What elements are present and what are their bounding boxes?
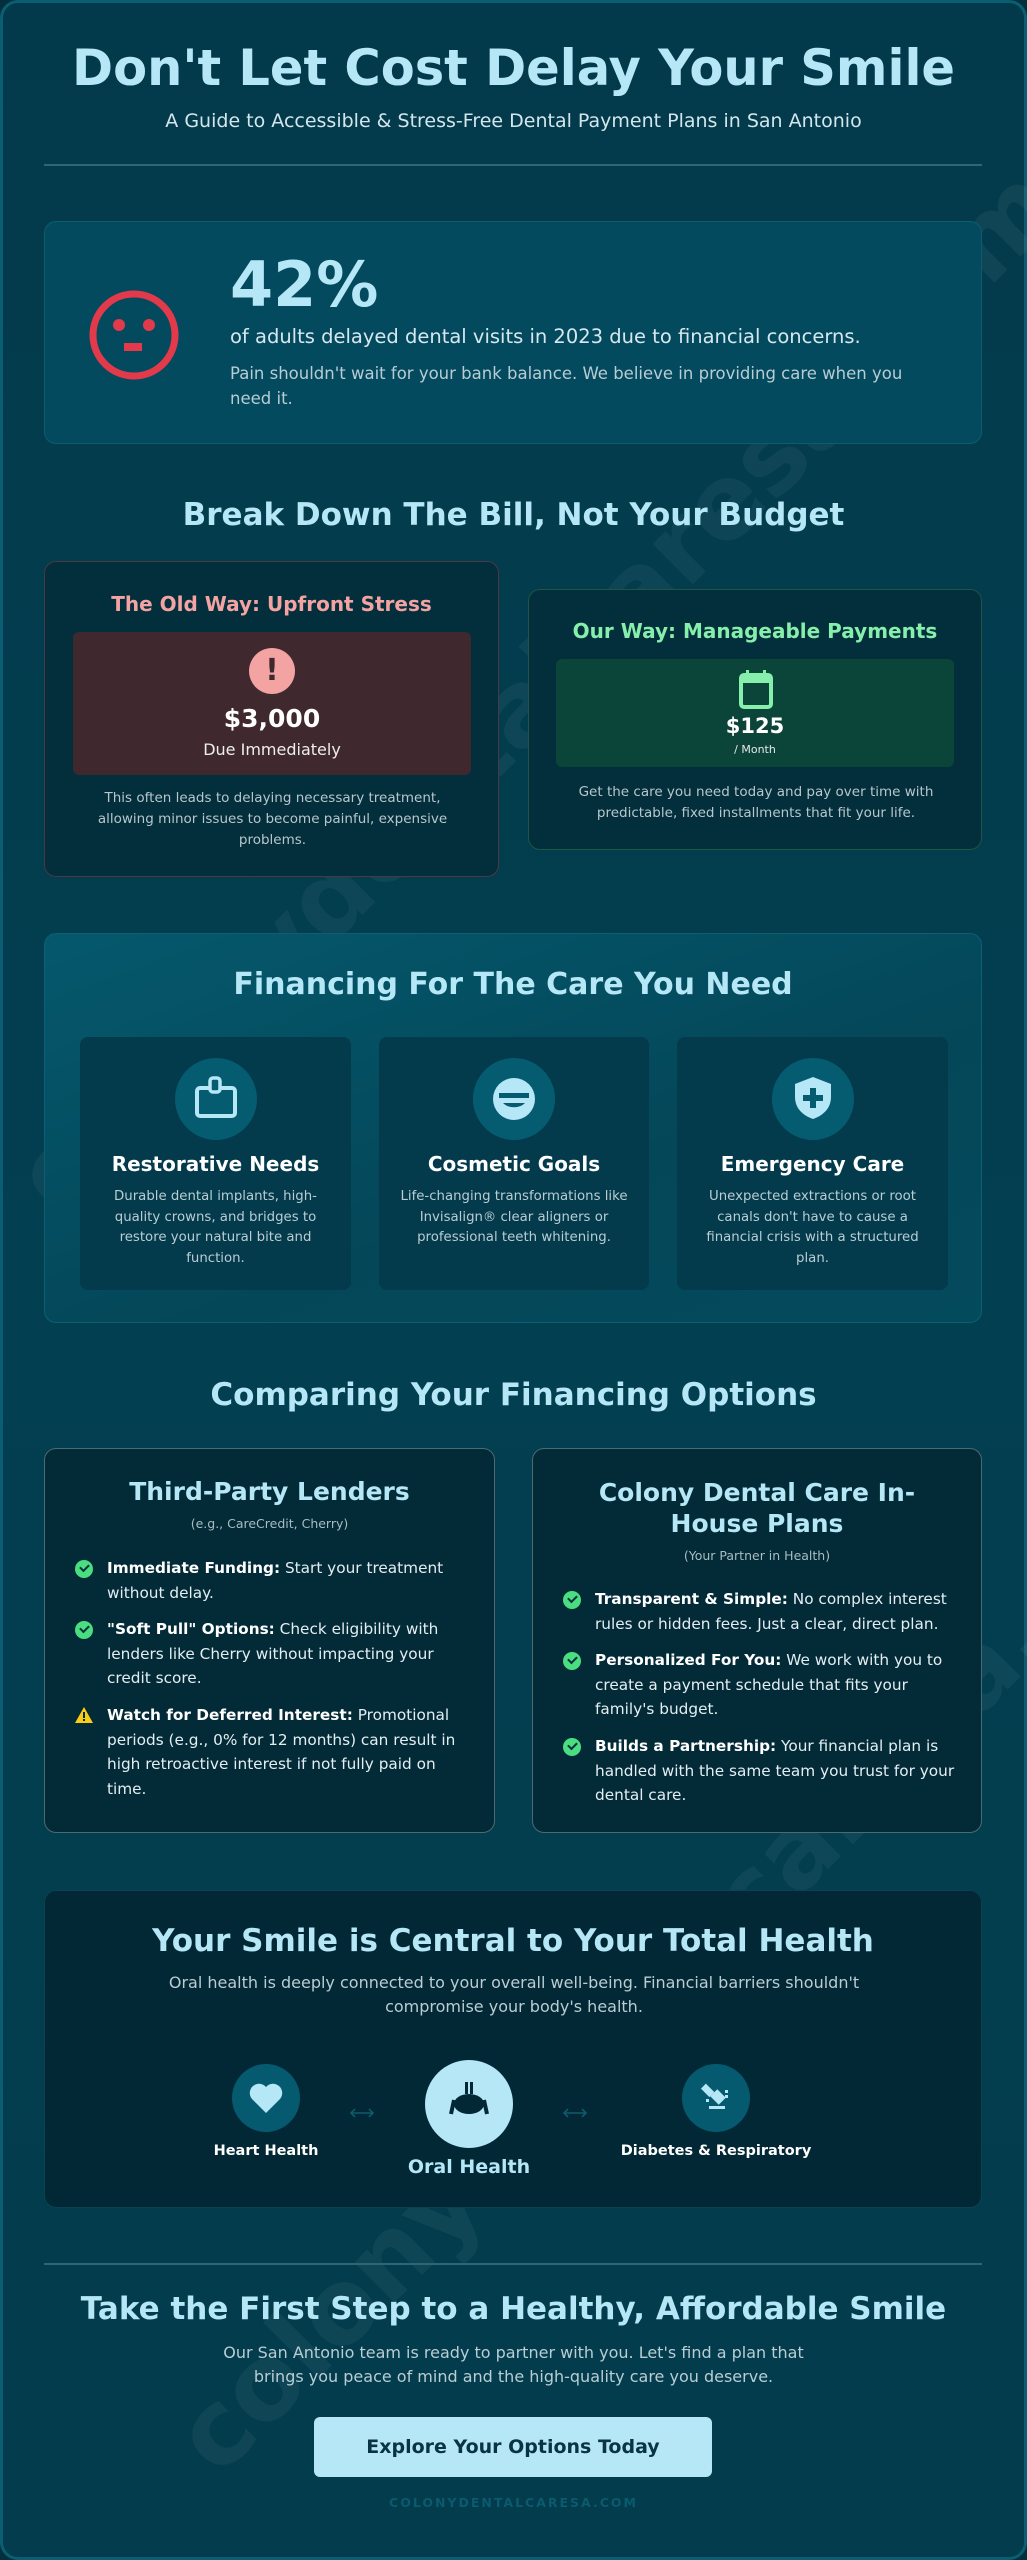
panel: stat (44, 221, 982, 444)
card: emergency (677, 1037, 948, 1290)
price box: $125: / Month (734, 743, 776, 756)
icon: cosmetic (473, 1058, 555, 1140)
panel: third-party lenders: (e.g., CareCredit, Cherry) (191, 1516, 348, 1531)
panel: total health: Oral health is deeply connected to your overall well-being. Financial barriers shouldn't compromise your body's health. (169, 1973, 859, 2016)
item: partnership: Builds a Partnership: Your financial plan is handled with the same team you trust for your dental care. (595, 1737, 954, 1804)
icon: calendar (739, 670, 773, 709)
item: transparent: Transparent & Simple: No complex interest rules or hidden fees. Just a clear, direct plan. (595, 1590, 947, 1632)
icon: diabetes & respiratory: Diabetes & Respiratory (621, 2143, 811, 2159)
panel: financing: Financing For The Care You Need (233, 967, 793, 1002)
title: Don't Let Cost Delay Your Smile (72, 39, 955, 97)
panel: total health: Your Smile is Central to Your Total Health (152, 1923, 874, 1959)
old way text: This often leads to delaying necessary treatment, allowing minor issues to become painful, expensive problems. (98, 790, 447, 848)
price box: $3,000: $3,000 (224, 704, 320, 733)
panel: old way: The Old Way: Upfront Stress (111, 592, 432, 616)
icon: oral health (408, 2060, 530, 2178)
icon: sad face (90, 290, 178, 380)
card: restorative: Restorative Needs (112, 1152, 319, 1176)
item: soft pull: "Soft Pull" Options: Check eligibility with lenders like Cherry without impacting your credit score. (107, 1620, 438, 1687)
card: cosmetic: Cosmetic Goals (428, 1152, 600, 1176)
cta text: Our San Antonio team is ready to partner with you. Let's find a plan that brings you peace of mind and the high-quality care you deserve. (223, 2343, 804, 2386)
arrow (350, 2108, 374, 2118)
card: emergency: Emergency Care (721, 1152, 904, 1176)
item: personalized: Personalized For You: We work with you to create a payment schedule that fits your family's budget. (595, 1651, 942, 1718)
price box: $3,000: Due Immediately (203, 740, 341, 759)
panel: in-house plans: (Your Partner in Health) (684, 1548, 830, 1563)
heading: break down: Break Down The Bill, Not Your Budget (183, 497, 844, 533)
price box: $125 (556, 659, 954, 767)
icon: oral health: Oral Health (408, 2156, 530, 2178)
price box: $125: $125 (726, 714, 784, 738)
button: Explore Your Options Today (366, 2436, 660, 2458)
arrow (563, 2108, 587, 2118)
panel: financing (44, 933, 982, 1323)
heading: call to action: Take the First Step to a Healthy, Affordable Smile (81, 2291, 946, 2327)
card: cosmetic: Life-changing transformations like Invisalign® clear aligners or professional teeth whitening. (400, 1189, 628, 1245)
our way text: Get the care you need today and pay over time with predictable, fixed installments that fit your life. (579, 784, 933, 821)
card: cosmetic (379, 1037, 649, 1290)
panel: our way (528, 589, 982, 850)
stat text: of adults delayed dental visits in 2023 due to financial concerns. (230, 325, 861, 348)
panel: third-party lenders: Third-Party Lenders (129, 1477, 410, 1506)
price box: $3,000 (73, 632, 471, 775)
card: emergency: Unexpected extractions or root canals don't have to cause a financial crisis with a structured plan. (706, 1189, 919, 1266)
button (314, 2417, 712, 2477)
footer url: COLONYDENTALCARESA.COM (389, 2495, 638, 2510)
heading: comparing: Comparing Your Financing Options (210, 1377, 817, 1413)
icon: shield (772, 1058, 854, 1140)
item: deferred interest warning: Watch for Deferred Interest: Promotional periods (e.g., 0% for 12 months) can result in high retroactive interest if not fully paid on time. (107, 1706, 455, 1798)
icon: restorative (175, 1058, 257, 1140)
subtitle: A Guide to Accessible & Stress-Free Dental Payment Plans in San Antonio (165, 110, 862, 132)
stat note: Pain shouldn't wait for your bank balance. We believe in providing care when you need it. (230, 364, 902, 408)
icon: diabetes & respiratory (621, 2064, 811, 2159)
icon: heart health: Heart Health (214, 2143, 318, 2159)
card: restorative: Durable dental implants, high-quality crowns, and bridges to restore your natural bite and function. (114, 1189, 317, 1266)
item: immediate funding: Immediate Funding: Start your treatment without delay. (107, 1559, 443, 1602)
stat number: 42% (230, 248, 378, 321)
panel: our way: Our Way: Manageable Payments (573, 619, 937, 643)
panel: in-house plans (532, 1448, 982, 1833)
icon: alert (249, 648, 295, 694)
panel: third-party lenders (44, 1448, 495, 1833)
panel: old way (44, 561, 499, 877)
card: restorative (80, 1037, 351, 1290)
panel: total health (44, 1890, 982, 2208)
icon: heart health (214, 2064, 318, 2159)
panel: in-house plans: Colony Dental Care In-House Plans (599, 1478, 915, 1538)
icon: alert: ! (265, 653, 279, 688)
